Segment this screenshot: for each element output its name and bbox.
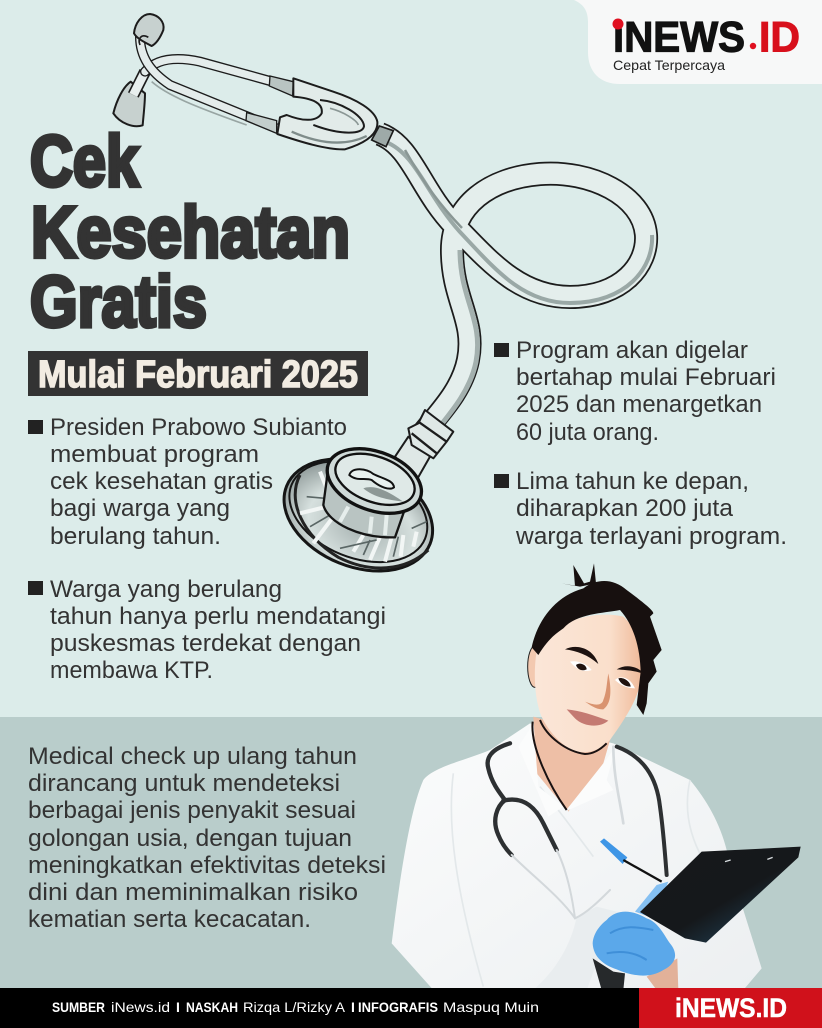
left bullet 1: bagi warga yang — [50, 495, 230, 522]
hair spikes — [562, 563, 596, 587]
upper arm — [145, 59, 270, 81]
footer credits: Rizqa L/Rizky A — [243, 999, 346, 1015]
right bullet 2 — [494, 468, 787, 550]
nose — [585, 673, 610, 709]
footer logo: iNEWS.ID — [675, 993, 787, 1023]
left bullet 2: tahun hanya perlu mendatangi — [50, 603, 386, 630]
clipboard clip marks — [725, 857, 773, 862]
clipboard — [640, 847, 801, 943]
tube connector — [372, 126, 393, 147]
left bullet 1: membuat program — [50, 441, 259, 468]
lower paragraph: kematian serta kecacatan. — [28, 906, 311, 933]
lower paragraph: dini dan meminimalkan risiko — [28, 879, 358, 906]
chestpiece — [267, 410, 453, 592]
lower paragraph: golongan usia, dengan tujuan — [28, 825, 352, 852]
chestpiece rim — [318, 437, 430, 525]
jaw line — [540, 720, 607, 754]
wrist — [647, 958, 678, 990]
neck — [533, 717, 610, 812]
subtitle text: Mulai Februari 2025 — [38, 354, 358, 396]
logo wordmark: iNEWS — [613, 14, 745, 62]
right bullet 1: bertahap mulai Februari — [516, 364, 776, 391]
right bullet 2: warga terlayani program. — [515, 523, 787, 550]
glove cuff — [635, 882, 668, 918]
title — [30, 122, 350, 342]
doctor illustration — [392, 563, 801, 990]
left bullet 1: Presiden Prabowo Subianto — [50, 414, 347, 441]
brows — [565, 647, 644, 674]
left bullet 2: puskesmas terdekat dengan — [50, 630, 361, 657]
lower paragraph: meningkatkan efektivitas deteksi — [28, 852, 386, 879]
neck line — [532, 722, 567, 810]
footer credits: I — [351, 999, 355, 1015]
footer credits: I — [176, 999, 180, 1015]
right bullet 2: Lima tahun ke depan, — [516, 468, 749, 495]
background lower band — [0, 717, 822, 988]
stethoscope illustration — [113, 14, 652, 592]
lower paragraph: Medical check up ulang tahun — [28, 743, 357, 770]
chestpiece cylinder — [323, 475, 420, 537]
U sleeve — [277, 78, 377, 149]
right bullet 1: 2025 dan menargetkan — [516, 391, 762, 418]
main tube — [380, 134, 652, 436]
strap — [593, 958, 625, 990]
logo dot accent — [612, 18, 624, 30]
ear — [528, 646, 542, 687]
hair — [532, 581, 662, 715]
stem neck — [395, 437, 430, 480]
footer credits: SUMBER — [52, 999, 105, 1015]
footer credits: iNews.id — [111, 999, 170, 1015]
footer logo block — [639, 988, 822, 1028]
coat folds — [451, 773, 703, 987]
lower ear stem — [133, 72, 145, 95]
right bullet 1 — [494, 337, 776, 446]
footer credits: Maspuq Muin — [443, 999, 539, 1015]
upper ear tip — [134, 14, 164, 46]
logo point — [750, 43, 756, 49]
lips — [567, 709, 608, 726]
chestpiece inner slot — [349, 469, 394, 489]
footer credits — [52, 999, 539, 1015]
left bullet 2: membawa KTP. — [50, 657, 213, 684]
footer credits: INFOGRAFIS — [358, 999, 438, 1015]
left bullet 1 — [28, 414, 347, 550]
stethoscope tubing — [488, 743, 667, 918]
title line 2: Kesehatan — [31, 193, 350, 273]
left bullet 2 — [28, 576, 386, 684]
lower paragraph: berbagai jenis penyakit sesuai — [28, 797, 356, 824]
glove highlight — [607, 927, 653, 960]
title line 3: Gratis — [30, 262, 207, 342]
logo ID: ID — [759, 14, 800, 62]
left bullet 2: Warga yang berulang — [50, 576, 282, 603]
stem collar — [408, 410, 453, 458]
collar — [518, 723, 617, 817]
left bullet 1: berulang tahun. — [50, 523, 221, 550]
right bullet 1: 60 juta orang. — [516, 419, 659, 446]
footer bar — [0, 988, 822, 1028]
spring inner ellipse — [313, 100, 364, 133]
right bullet 2: diharapkan 200 juta — [516, 495, 734, 522]
face — [535, 615, 642, 752]
eyes — [570, 661, 635, 688]
binaural headset — [113, 14, 393, 149]
coat — [392, 723, 762, 990]
title line 1: Cek — [30, 122, 140, 202]
logo tagline: Cepat Terpercaya — [613, 57, 725, 73]
footer credits: NASKAH — [186, 999, 238, 1015]
right bullet 1: Program akan digelar — [516, 337, 748, 364]
lower arm — [140, 37, 277, 128]
irises — [576, 664, 631, 687]
lower paragraph — [28, 743, 386, 933]
lower paragraph: dirancang untuk mendeteksi — [28, 770, 340, 797]
left bullet 1: cek kesehatan gratis — [50, 468, 273, 495]
lower ear tip — [113, 82, 145, 126]
pen — [600, 838, 662, 882]
coat shading — [533, 907, 623, 990]
glove — [593, 912, 675, 976]
subtitle banner — [28, 351, 368, 396]
background upper — [0, 0, 822, 717]
chestpiece disc — [267, 438, 449, 592]
logo panel — [574, 0, 822, 84]
metal rods — [269, 76, 293, 96]
